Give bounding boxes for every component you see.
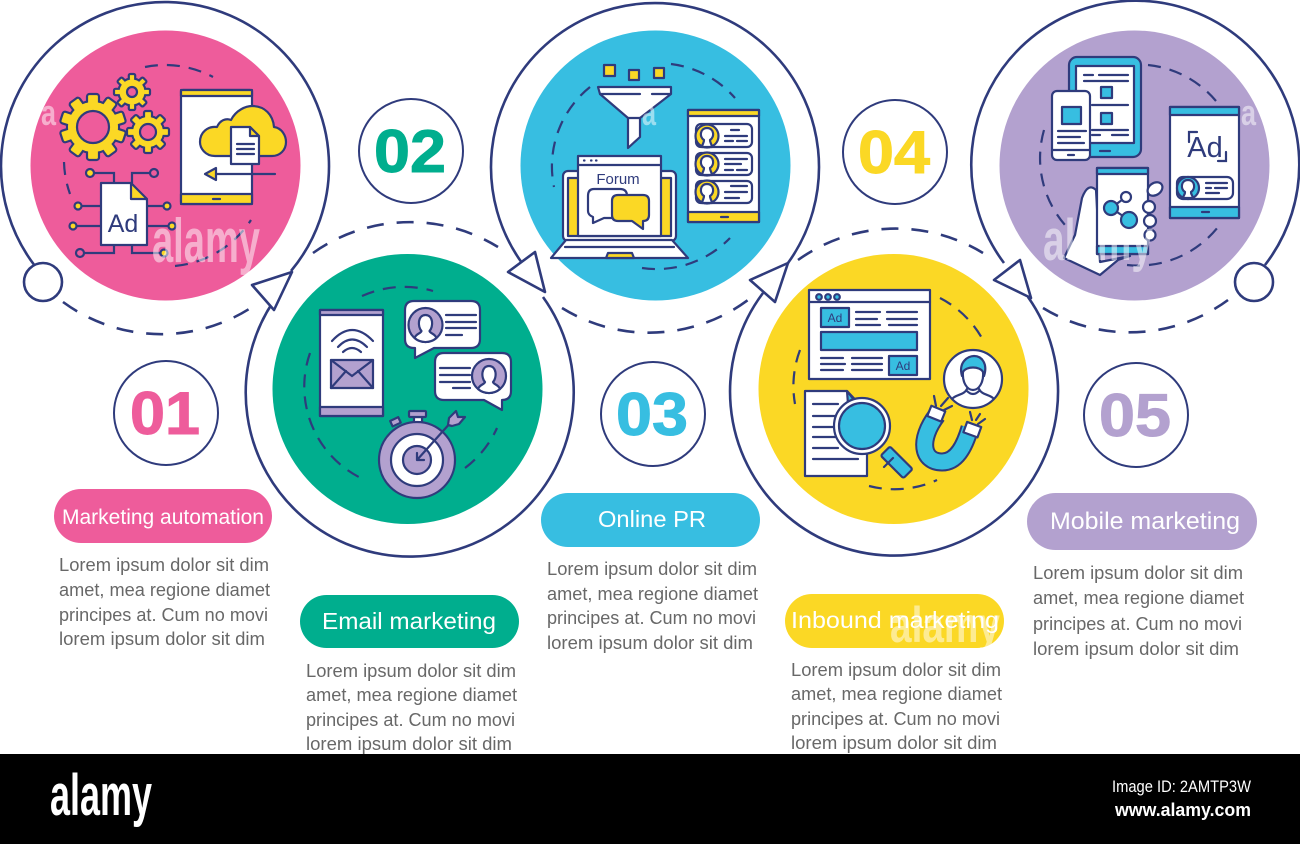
watermark letter: a <box>1241 92 1257 133</box>
watermark: alamy <box>152 207 260 276</box>
icon: tablet with ad <box>1170 107 1239 218</box>
watermark letter: a <box>642 92 657 133</box>
footer band <box>0 754 1300 844</box>
website: www.alamy.com <box>1114 800 1251 820</box>
text block 3 <box>547 559 758 653</box>
label: inbound marketing: Inbound marketing <box>791 607 999 633</box>
text block 1: Lorem ipsum dolor sit dim <box>59 555 269 575</box>
arrow 2 <box>508 252 545 292</box>
icon: gears <box>60 74 169 160</box>
watermark: alamy <box>890 597 1000 653</box>
icon: tablet with ad: Ad <box>1187 132 1223 164</box>
icon: tablet with cloud <box>181 90 286 204</box>
icon: browser with ads <box>809 290 930 379</box>
icon: ad document with circuit <box>70 169 176 257</box>
label: mobile marketing: Mobile marketing <box>1050 508 1240 535</box>
text block 3: amet, mea regione diamet <box>547 584 758 604</box>
text block 5: lorem ipsum dolor sit dim <box>1033 639 1239 659</box>
text block 2: lorem ipsum dolor sit dim <box>306 734 512 754</box>
text block 4 <box>791 660 1002 753</box>
panel: mobile marketing circle <box>971 1 1299 332</box>
icon: funnel <box>598 65 671 148</box>
text block 3: Lorem ipsum dolor sit dim <box>547 559 757 579</box>
watermark letter: a <box>41 92 57 133</box>
icon: tablet with email <box>320 310 383 416</box>
label: marketing automation <box>54 489 272 543</box>
arrow 1 <box>252 272 292 310</box>
text block 4: amet, mea regione diamet <box>791 684 1002 704</box>
text block 5: amet, mea regione diamet <box>1033 588 1244 608</box>
panel: online PR circle <box>491 3 819 333</box>
icon: tablet with contacts <box>688 110 759 222</box>
icon: user avatar <box>944 350 1002 408</box>
text block 2: amet, mea regione diamet <box>306 685 517 705</box>
arrow 4 <box>994 260 1031 298</box>
icon: browser with ads: Ad <box>828 311 842 325</box>
image id: Image ID: 2AMTP3W <box>1112 777 1251 796</box>
text block 3: lorem ipsum dolor sit dim <box>547 633 753 653</box>
text block 1: lorem ipsum dolor sit dim <box>59 629 265 649</box>
text block 2 <box>306 661 517 754</box>
icon: tablet and phone <box>1052 57 1141 160</box>
panel: inbound marketing circle <box>730 229 1058 556</box>
icon: hand holding phone <box>1064 168 1165 275</box>
text block 4: principes at. Cum no movi <box>791 709 1000 729</box>
arrows <box>252 252 1031 310</box>
watermark: alamy <box>1043 208 1153 273</box>
arrow 3 <box>750 263 788 302</box>
text block 1: principes at. Cum no movi <box>59 605 268 625</box>
panel: email marketing circle <box>246 222 574 557</box>
label: online PR: Online PR <box>598 506 706 532</box>
number badge 01: 01 <box>130 380 200 447</box>
number badge 02: 02 <box>374 118 446 185</box>
text block 4: Lorem ipsum dolor sit dim <box>791 660 1001 680</box>
text block 2: principes at. Cum no movi <box>306 710 515 730</box>
number badge 03 <box>601 362 705 466</box>
number badge 05: 05 <box>1099 382 1171 449</box>
icon: laptop forum <box>551 156 688 258</box>
text block 1 <box>59 555 270 649</box>
label: marketing automation: Marketing automation <box>62 506 264 529</box>
text block 5 <box>1033 563 1244 659</box>
icon: magnet <box>925 396 985 462</box>
label: online PR <box>541 493 760 547</box>
text block 4: lorem ipsum dolor sit dim <box>791 733 997 753</box>
number badge 03: 03 <box>616 381 688 448</box>
text block 1: amet, mea regione diamet <box>59 580 270 600</box>
number badge 02 <box>359 99 463 203</box>
number badge 04: 04 <box>858 119 931 186</box>
number badge 05 <box>1084 363 1188 467</box>
number badge 04 <box>843 100 947 204</box>
text block 3: principes at. Cum no movi <box>547 608 756 628</box>
icon: ad document with circuit: Ad <box>108 210 138 238</box>
label: email marketing: Email marketing <box>322 608 496 634</box>
text block 2: Lorem ipsum dolor sit dim <box>306 661 516 681</box>
panel: marketing automation circle <box>1 2 329 334</box>
icon: document with magnifier <box>805 391 913 478</box>
label: mobile marketing <box>1027 493 1257 550</box>
number badge 01 <box>114 361 218 465</box>
text block 5: Lorem ipsum dolor sit dim <box>1033 563 1243 583</box>
icon: laptop forum: Forum <box>596 171 640 188</box>
icon: browser with ads: Ad <box>896 359 910 373</box>
icon: chat bubbles <box>405 301 511 410</box>
footer logo: alamy <box>50 763 152 828</box>
label: inbound marketing <box>785 594 1004 653</box>
label: email marketing <box>300 595 519 648</box>
icon: stopwatch target <box>379 411 465 498</box>
text block 5: principes at. Cum no movi <box>1033 614 1242 634</box>
